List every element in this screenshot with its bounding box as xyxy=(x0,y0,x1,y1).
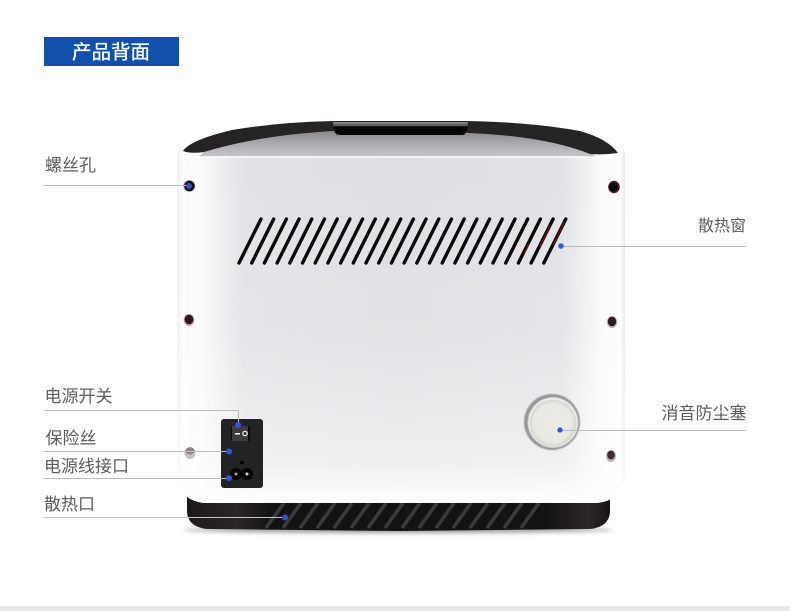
ground shadow xyxy=(183,527,613,533)
callout: 消音防尘塞: 消音防尘塞 xyxy=(662,404,746,423)
callout: 散热口: 散热口 xyxy=(44,495,95,514)
screw holes xyxy=(183,180,620,462)
product: oxygen concentrator rear view xyxy=(177,120,625,533)
callout: 螺丝孔: 螺丝孔 xyxy=(45,156,96,175)
white main body xyxy=(177,145,625,503)
top handle xyxy=(333,122,468,135)
callout: 螺丝孔 xyxy=(44,156,192,189)
silencer dust plug xyxy=(524,394,580,450)
title banner: 产品背面 xyxy=(72,42,150,64)
callout: 电源线接口: 电源线接口 xyxy=(44,457,129,476)
callout: 保险丝 xyxy=(44,429,232,454)
callout: 散热窗: 散热窗 xyxy=(698,217,746,235)
callout: 散热口 xyxy=(44,495,288,520)
callout: 电源线接口 xyxy=(44,457,232,481)
dark base with vents xyxy=(187,494,610,531)
callout: 电源开关 xyxy=(44,387,241,428)
red tint inside slots xyxy=(524,222,564,254)
body top highlight xyxy=(186,156,606,158)
top dark rim xyxy=(183,121,618,154)
callout: 消音防尘塞 xyxy=(557,404,746,433)
white backdrop above body edge xyxy=(178,120,624,155)
vent slots xyxy=(239,219,566,263)
rear panel: switch and power socket xyxy=(221,419,263,488)
callout: 电源开关: 电源开关 xyxy=(44,387,112,406)
callout: 散热窗 xyxy=(558,217,746,249)
grey top panel xyxy=(198,131,597,157)
title banner xyxy=(44,37,179,66)
bottom grey strip xyxy=(0,606,790,611)
callout: 保险丝: 保险丝 xyxy=(46,429,96,448)
power socket xyxy=(230,461,253,480)
rocker switch xyxy=(231,426,250,441)
